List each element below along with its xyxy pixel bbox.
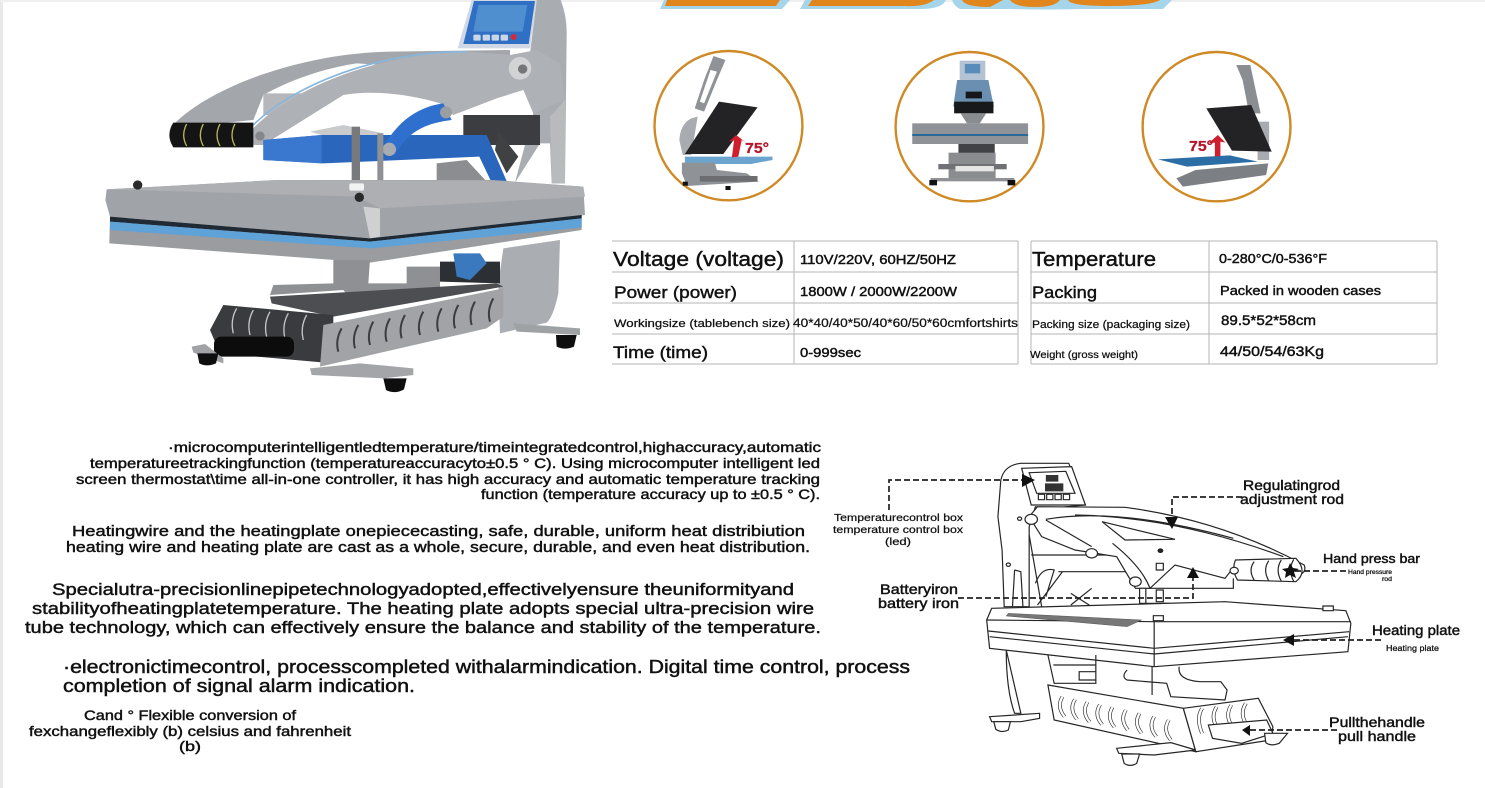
perforated housing — [1048, 685, 1273, 752]
row: voltage — [613, 249, 956, 271]
row: time — [613, 343, 862, 362]
row: weight: 44/50/54/63Kg — [1220, 343, 1324, 359]
circle view 2: press front view — [896, 52, 1043, 201]
callout: pull handle — [1242, 714, 1425, 744]
row: voltage: Voltage (voltage) — [613, 249, 784, 271]
upper frame — [1029, 535, 1233, 607]
callout: temperature control box — [833, 474, 1035, 548]
callout: temperature control box: (led) — [885, 536, 911, 548]
row: voltage: 110V/220V, 60HZ/50HZ — [800, 252, 956, 267]
line diagram of the press — [987, 463, 1351, 765]
text block: celsius fahrenheit feature: Cand ° Flexible conversion of — [84, 707, 296, 723]
row: working size: 40*40/40*50/40*60/50*60cmfortshirts — [793, 318, 1018, 330]
spec table right — [1030, 241, 1437, 364]
display — [1022, 467, 1085, 505]
text block: digital time control feature — [63, 657, 910, 696]
feet — [513, 323, 580, 335]
row: packing size — [1032, 312, 1316, 331]
callout: adjustment rod: Regulatingrod — [1243, 477, 1340, 493]
text block: wire tube technology feature: tube technology, which can effectively ensure the balance and stability of the temperature. — [25, 618, 821, 637]
text block: temperature control feature — [76, 439, 821, 502]
row: power: Power (power) — [614, 283, 737, 302]
callout: battery iron — [878, 567, 1199, 611]
row: packing size: Packing size (packaging size) — [1032, 319, 1190, 331]
callout: hand press bar: Hand pressure — [1348, 570, 1393, 576]
callout: pull handle: pull handle — [1338, 728, 1416, 744]
blue bracket — [263, 135, 507, 183]
callout: hand press bar: Hand press bar — [1323, 551, 1421, 566]
callout: battery iron: Batteryiron — [880, 581, 958, 597]
callout: adjustment rod — [1165, 477, 1344, 529]
pull drawer and handle — [210, 305, 333, 363]
row: weight: Weight (gross weight) — [1030, 350, 1138, 361]
spec table left — [612, 241, 1018, 364]
callout: temperature control box: temperature control box — [833, 524, 964, 536]
text block: heating wire feature: Heatingwire and the heatingplate onepiececasting, safe, durable, uniform heat distribiution — [72, 523, 805, 540]
circle view 3: press open, side right 75 degrees: 75° — [1189, 138, 1213, 155]
text block: celsius fahrenheit feature: fexchangeflexibly (b) celsius and fahrenheit — [29, 723, 351, 739]
text block: temperature control feature: screen thermostat\time all-in-one controller, it has high accuracy and automatic temperature tracking — [76, 471, 820, 487]
back arm — [170, 50, 510, 128]
text block: wire tube technology feature: stabilityofheatingplatetemperature. The heating plate adopts special ultra-precision wire — [32, 599, 814, 618]
circle view 1: press open, side left 75 degrees: 75° — [745, 140, 769, 157]
row: temperature — [1032, 249, 1327, 271]
row: time: Time (time) — [613, 343, 708, 362]
callout: temperature control box: Temperaturecontrol box — [834, 512, 964, 524]
text block: wire tube technology feature — [25, 580, 821, 637]
main photo: heat press machine — [105, 0, 585, 392]
callout: battery iron: battery iron — [878, 595, 959, 611]
column of the press — [515, 0, 567, 183]
row: working size — [614, 318, 1018, 330]
circle view 3: press open, side right 75 degrees — [1143, 52, 1291, 201]
text block: celsius fahrenheit feature: (b) — [179, 738, 201, 754]
front arm — [250, 50, 565, 145]
circle view 1: press open, side left 75 degrees — [655, 51, 802, 200]
perforated side cover — [320, 288, 503, 367]
upper heating plate — [105, 180, 585, 238]
text block: temperature control feature: temperatureetrackingfunction (temperatureaccuracyto±0.5 ° C). Using microcomputer intelligent led — [90, 455, 820, 471]
row: packing: Packed in wooden cases — [1220, 283, 1382, 298]
text block: digital time control feature: ·electronictimecontrol, processcompleted withalarmindication. Digital time control, process — [63, 657, 910, 677]
row: power — [614, 283, 958, 302]
handle grip — [1230, 558, 1302, 582]
row: packing size: 89.5*52*58cm — [1221, 312, 1316, 328]
handle grip — [169, 123, 253, 147]
pull handle — [1208, 720, 1273, 743]
row: packing: Packing — [1032, 283, 1097, 302]
text block: celsius fahrenheit feature — [29, 707, 351, 754]
silicone pad and lower plate — [109, 215, 582, 263]
text block: temperature control feature: ·microcomputerintelligentledtemperature/timeintegratedcontrol,highaccuracy,automatic — [168, 439, 821, 455]
callout: hand press bar — [1282, 551, 1421, 583]
header: cropped series title — [660, 0, 1172, 10]
row: time: 0-999sec — [800, 345, 862, 360]
row: power: 1800W / 2000W/2200W — [800, 284, 958, 299]
base arm — [498, 240, 560, 333]
callout: heating plate — [1283, 623, 1460, 653]
row: weight — [1030, 343, 1324, 361]
feet — [990, 713, 1040, 722]
callout: hand press bar: rod — [1382, 577, 1392, 583]
lower frame — [1006, 650, 1021, 713]
heating plate — [987, 602, 1351, 667]
text block: heating wire feature: heating wire and heating plate are cast as a whole, secure, durable, and even heat distribution. — [66, 539, 810, 556]
row: packing — [1032, 283, 1382, 302]
control panel — [458, 0, 537, 48]
callout: adjustment rod: adjustment rod — [1240, 491, 1344, 507]
text block: temperature control feature: function (temperature accuracy up to ±0.5 ° C). — [481, 486, 820, 502]
callout: heating plate: Heating plate — [1372, 623, 1460, 638]
text block: digital time control feature: completion of signal alarm indication. — [63, 676, 415, 696]
text block: heating wire feature — [66, 523, 810, 556]
row: working size: Workingsize (tablebench size) — [614, 318, 790, 330]
callout: pull handle: Pullthehandle — [1329, 714, 1425, 730]
row: temperature: Temperature — [1032, 249, 1156, 271]
text block: wire tube technology feature: Specialutra-precisionlinepipetechnologyadopted,effectivelyensure theuniformityand — [52, 580, 794, 599]
row: temperature: 0-280°C/0-536°F — [1219, 252, 1327, 266]
slide base — [270, 283, 503, 317]
callout: heating plate: Heating plate — [1386, 644, 1440, 653]
